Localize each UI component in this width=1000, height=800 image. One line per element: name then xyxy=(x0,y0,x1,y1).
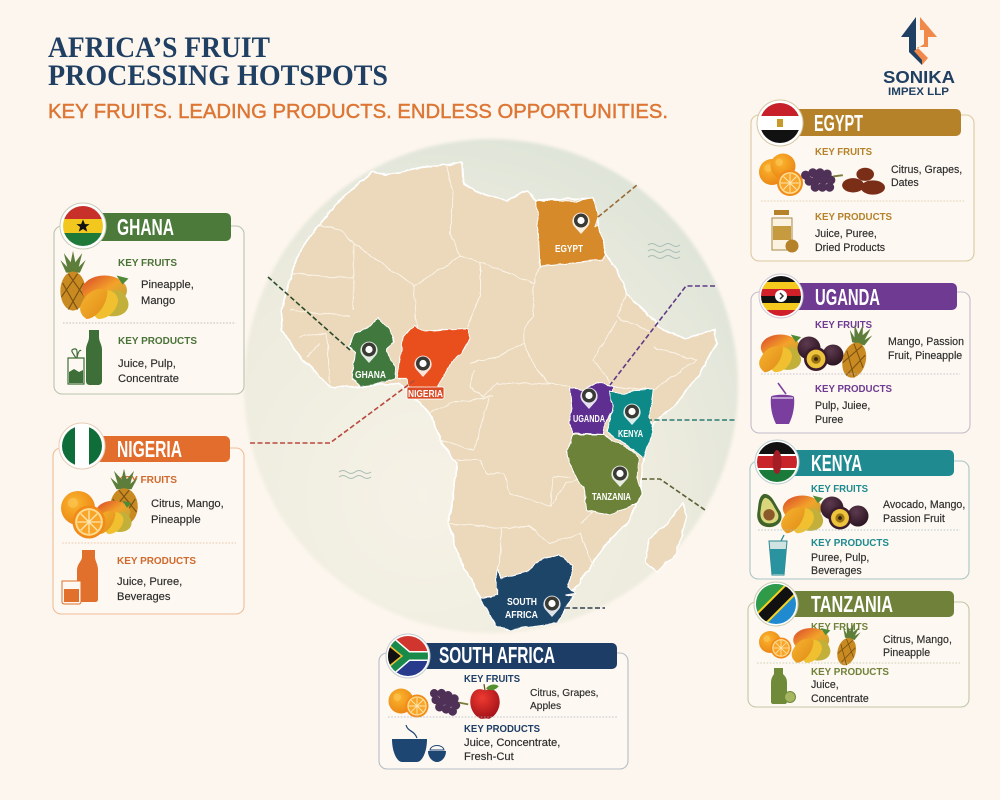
fruits text: Apples xyxy=(530,701,561,712)
fruit icons xyxy=(759,322,874,380)
fruits text: Passion Fruit xyxy=(883,513,945,525)
fruits text: Citrus, Mango, xyxy=(151,498,224,510)
products text: Juice, Puree, xyxy=(815,228,877,240)
products text xyxy=(811,679,869,705)
waves xyxy=(339,244,680,478)
connector lines xyxy=(250,185,735,608)
products text: Concentrate xyxy=(118,373,179,385)
land and borders xyxy=(282,162,717,630)
card xyxy=(379,653,628,769)
key products label: KEY PRODUCTS xyxy=(811,666,889,678)
products text xyxy=(118,358,179,385)
country borders xyxy=(290,165,697,568)
country: Tanzania xyxy=(567,435,642,515)
header bar xyxy=(790,109,961,136)
header bar xyxy=(418,643,617,669)
country: South Africa xyxy=(480,554,575,630)
fruit icons xyxy=(759,622,862,667)
fruits text xyxy=(883,634,952,659)
card xyxy=(53,448,244,614)
panel: Tanzania xyxy=(748,582,969,707)
fruits text: Fruit, Pineapple xyxy=(888,350,962,362)
key products label: KEY PRODUCTS xyxy=(117,555,196,567)
flag xyxy=(386,634,430,678)
continent xyxy=(282,162,717,630)
map labels: GHANA xyxy=(355,369,386,381)
map: Africa globe xyxy=(244,139,738,633)
flag xyxy=(759,274,803,318)
fruits text: Citrus, Mango, xyxy=(883,634,952,646)
key products label: KEY PRODUCTS xyxy=(815,211,892,223)
map labels: EGYPT xyxy=(555,243,583,255)
products text: Puree xyxy=(815,414,843,426)
key products label: KEY PRODUCTS xyxy=(815,383,892,395)
map labels: SOUTH xyxy=(507,596,537,608)
logo: Sonika Impex LLP xyxy=(883,17,955,98)
fruit icons xyxy=(759,154,885,196)
fruits text: Pineapple, xyxy=(141,279,194,291)
products text: Juice, xyxy=(811,679,839,691)
heading: TANZANIA xyxy=(811,591,893,617)
pins xyxy=(360,213,641,617)
header bar xyxy=(788,450,954,476)
flag xyxy=(59,423,105,469)
fruits text xyxy=(891,164,962,189)
logo wordmark: SONIKA xyxy=(883,67,955,87)
fruits text xyxy=(883,499,965,525)
map labels: TANZANIA xyxy=(592,491,631,503)
fruits text: Mango xyxy=(141,295,175,307)
panel: Uganda xyxy=(751,274,970,433)
key fruits label: KEY FRUITS xyxy=(117,474,177,486)
flag xyxy=(754,582,798,626)
panel: South Africa xyxy=(379,634,628,769)
icon: glass with straw xyxy=(769,535,787,575)
fruit icons xyxy=(60,251,128,319)
icon: bottle and glass xyxy=(62,550,98,604)
card xyxy=(750,461,969,579)
key fruits label: KEY FRUITS xyxy=(811,483,868,495)
sea circle xyxy=(244,139,738,633)
flag xyxy=(755,440,799,484)
icon: bottle with slice xyxy=(771,668,796,704)
fruit icons xyxy=(757,494,868,533)
fruits text: Citrus, Grapes, xyxy=(530,688,599,699)
heading: EGYPT xyxy=(814,110,863,136)
products text: Dried Products xyxy=(815,242,885,254)
icon: jar xyxy=(772,210,798,252)
panel: Kenya xyxy=(750,440,969,579)
products text: Juice, Puree, xyxy=(117,576,182,588)
header bar xyxy=(792,283,957,310)
key fruits label: KEY FRUITS xyxy=(464,673,520,685)
fruits text: Pineapple xyxy=(883,647,930,659)
heading: KENYA xyxy=(811,450,862,476)
title: PROCESSING HOTSPOTS xyxy=(48,59,388,92)
card xyxy=(54,226,244,394)
products text: Puree, Pulp, xyxy=(811,552,869,564)
fruits text: Dates xyxy=(891,177,919,189)
heading: SOUTH AFRICA xyxy=(439,642,555,668)
products text: Juice, Concentrate, xyxy=(464,737,560,749)
country: Uganda xyxy=(568,383,615,435)
icon: logo arrows xyxy=(901,17,937,65)
map labels: KENYA xyxy=(618,428,643,440)
products text: Pulp, Juiee, xyxy=(815,400,870,412)
products text xyxy=(815,228,885,254)
header bar xyxy=(788,591,954,617)
country: Ghana xyxy=(348,318,396,387)
map labels: UGANDA xyxy=(573,413,605,425)
products text: Concentrate xyxy=(811,693,869,705)
flag xyxy=(60,203,106,249)
key fruits label: KEY FRUITS xyxy=(815,146,872,158)
card xyxy=(751,292,970,433)
icon: smoothie xyxy=(771,383,794,424)
heading: UGANDA xyxy=(815,284,880,310)
fruits text xyxy=(141,279,194,307)
card xyxy=(751,115,974,261)
country: Nigeria xyxy=(397,325,470,388)
country: Egypt xyxy=(537,198,605,267)
products text xyxy=(815,400,870,426)
subtitle: KEY FRUITS. LEADING PRODUCTS. ENDLESS OPPORTUNITIES. xyxy=(48,101,668,123)
panel: Egypt xyxy=(751,100,974,261)
title xyxy=(48,31,388,92)
title: AFRICA’S FRUIT xyxy=(48,31,270,64)
key fruits label: KEY FRUITS xyxy=(811,621,868,633)
header bar xyxy=(96,436,230,462)
fruit icons xyxy=(61,469,138,538)
logo wordmark: IMPEX LLP xyxy=(888,86,949,98)
card xyxy=(748,602,969,707)
map labels xyxy=(355,243,643,621)
products text: Juice, Pulp, xyxy=(118,358,176,370)
Nigeria label plate xyxy=(407,387,444,399)
key products label: KEY PRODUCTS xyxy=(464,723,540,735)
key products label: KEY PRODUCTS xyxy=(118,335,197,347)
fruit icons xyxy=(388,684,500,719)
heading: NIGERIA xyxy=(117,436,182,462)
header bar xyxy=(96,213,231,241)
fruits text xyxy=(888,336,964,362)
map labels: NIGERIA xyxy=(408,388,443,400)
fruits text: Avocado, Mango, xyxy=(883,499,965,511)
products text: Fresh-Cut xyxy=(464,751,515,763)
panel: Ghana xyxy=(54,203,244,394)
fruits text: Citrus, Grapes, xyxy=(891,164,962,176)
fruits text xyxy=(151,498,224,526)
fruits text xyxy=(530,688,599,712)
products text xyxy=(117,576,182,603)
products text xyxy=(811,552,869,577)
panel: Nigeria xyxy=(53,423,244,614)
icon: bottle and glass xyxy=(68,330,102,385)
key fruits label: KEY FRUITS xyxy=(815,319,872,331)
flag xyxy=(757,100,803,146)
products text xyxy=(464,737,560,763)
key fruits label: KEY FRUITS xyxy=(118,257,177,269)
fruits text: Pineapple xyxy=(151,514,201,526)
map labels: AFRICA xyxy=(505,609,538,621)
key products label: KEY PRODUCTS xyxy=(811,537,889,549)
logo wordmark xyxy=(883,67,955,98)
products text: Beverages xyxy=(811,565,862,577)
icon: bowls xyxy=(392,725,446,762)
heading: GHANA xyxy=(117,214,174,240)
Madagascar xyxy=(647,503,687,572)
country: Kenya xyxy=(607,389,653,458)
products text: Beverages xyxy=(117,591,171,603)
fruits text: Mango, Passion xyxy=(888,336,964,348)
